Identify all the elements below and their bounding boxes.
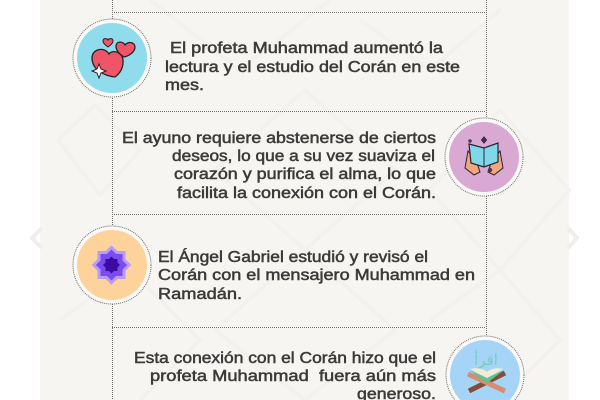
icon: Quran on stand: اقرأ (474, 350, 498, 369)
text block 4 (134, 350, 436, 400)
text block 4: Esta conexión con el Corán hizo que el (134, 350, 436, 367)
left arrow (32, 228, 42, 248)
text block 3: Corán con el mensajero Muhammad en (158, 267, 475, 284)
icon: hearts (73, 19, 151, 97)
text block 3: El Ángel Gabriel estudió y revisó el (158, 249, 428, 266)
text block 2: corazón y purifica el alma, lo que (174, 166, 436, 183)
text block 3: Ramadán. (158, 286, 242, 303)
text block 1: lectura y el estudio del Corán en este (165, 59, 460, 76)
text block 2: facilita la conexión con el Corán. (177, 185, 436, 202)
text block 3 (158, 249, 475, 303)
text block 2 (122, 130, 436, 202)
text block 1: El profeta Muhammad aumentó la (170, 40, 443, 57)
text block 1: mes. (165, 77, 204, 94)
timeline frame (112, 0, 486, 400)
right arrow (568, 228, 577, 248)
text block 4: profeta Muhammad fuera aún más (150, 368, 436, 385)
text block 2: El ayuno requiere abstenerse de ciertos (122, 130, 436, 147)
icon: open book in hands (445, 118, 523, 196)
icon: octagram star (73, 226, 151, 304)
text block 2: deseos, lo que a su vez suaviza el (172, 148, 435, 165)
text block 1 (165, 40, 460, 94)
icon: Quran on stand (446, 336, 524, 400)
